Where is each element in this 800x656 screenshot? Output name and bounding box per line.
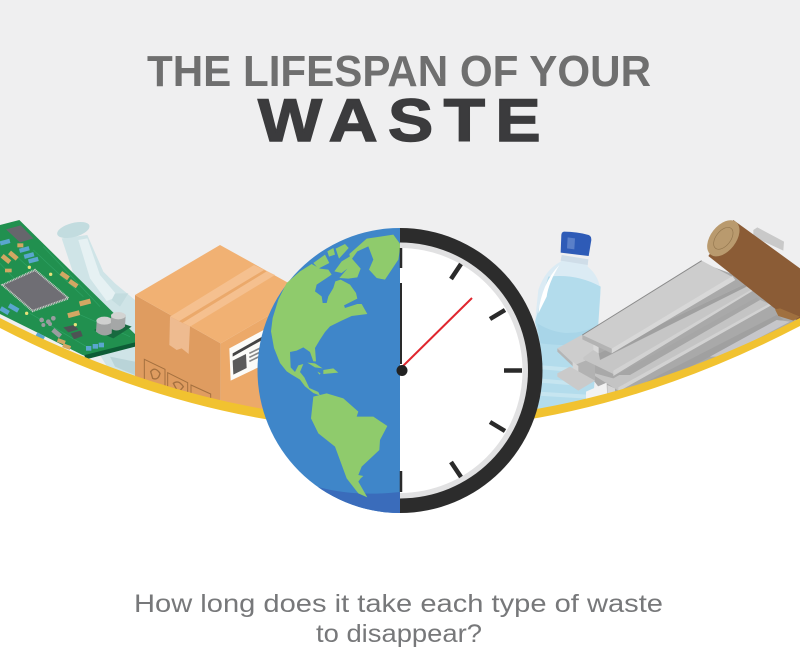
icon: water bottle [527, 232, 601, 423]
tape [170, 265, 275, 327]
globe half [258, 228, 400, 513]
icon: steel end [753, 227, 784, 251]
globe shadow [318, 487, 400, 513]
beam body fill [593, 263, 800, 407]
tan components [1, 243, 91, 350]
clock bezel [400, 228, 542, 513]
second flange [583, 284, 754, 374]
clock hands [396, 248, 472, 492]
title [147, 47, 651, 154]
third flange [595, 298, 772, 391]
title: THE LIFESPAN OF YOUR [147, 47, 651, 96]
icon: glass flask [55, 219, 135, 382]
subtitle: How long does it take each type of waste [134, 590, 663, 618]
icon: circuit board [0, 220, 142, 359]
icon: wood log [701, 214, 800, 321]
title: WASTE [258, 87, 551, 154]
clock face [400, 248, 522, 493]
icon: steel beams [557, 261, 800, 407]
subtitle: to disappear? [316, 620, 482, 648]
main chip [3, 270, 68, 311]
small chip [6, 225, 33, 242]
top flange [582, 261, 732, 349]
traces [0, 247, 130, 347]
continents: north america and greenland [271, 235, 401, 396]
capacitors [94, 320, 132, 338]
web of top beam [593, 343, 599, 366]
subtitle [134, 590, 663, 648]
handling marks [144, 359, 211, 413]
clock half [400, 228, 542, 513]
shipping label [229, 328, 267, 381]
icon: cardboard box [135, 245, 300, 423]
hour ticks [451, 264, 522, 477]
lower strip [647, 315, 783, 382]
white lower background with yellow curve [0, 318, 800, 656]
continents: south america and caribbean [307, 363, 387, 497]
lower left flanges and webs [573, 348, 595, 385]
tiny parts [39, 316, 62, 338]
blue components [0, 239, 104, 351]
